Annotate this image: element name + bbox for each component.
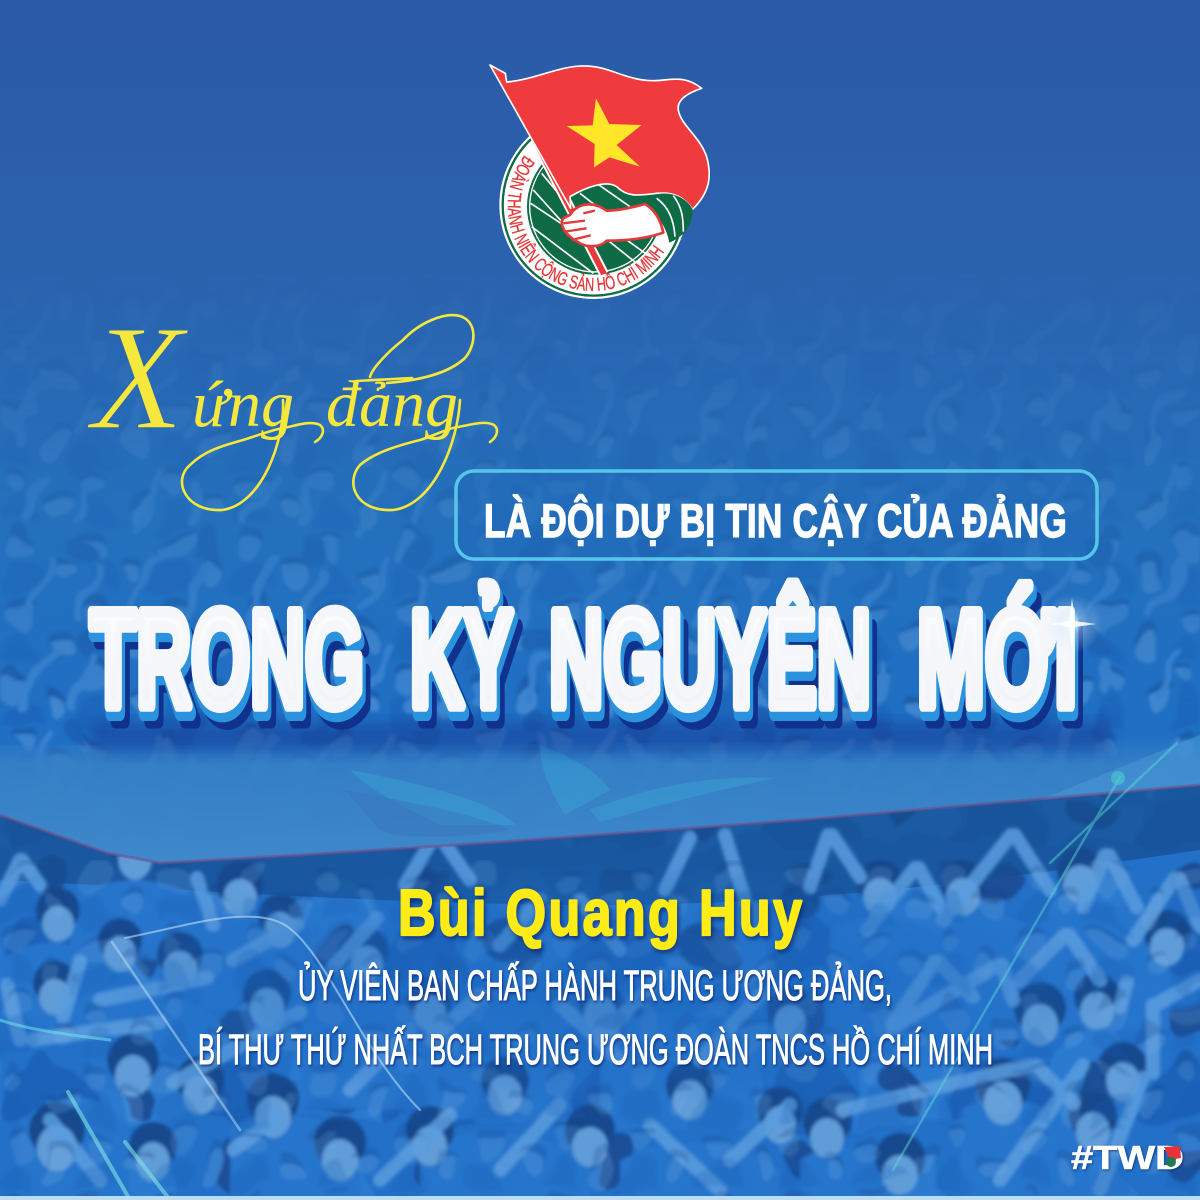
script words: đảng — [326, 368, 458, 441]
mini emblem in letter D — [1164, 1146, 1181, 1167]
title navy extrusion: TRONG — [97, 598, 371, 751]
title navy extrusion: MỚI — [924, 598, 1084, 751]
crowd shadow beneath flag — [0, 785, 1200, 905]
raised arms — [0, 835, 1200, 1190]
flag lower edge tint — [0, 785, 1200, 863]
flag — [490, 65, 709, 209]
emblem green rings — [503, 114, 684, 296]
flag right light fold — [1040, 735, 1200, 800]
decorative light curves — [0, 743, 1177, 1200]
script flourishes — [182, 315, 497, 510]
title white face — [90, 582, 1077, 736]
arm and fist — [562, 204, 663, 246]
emblem outer white disc — [499, 111, 687, 299]
logo: Ho Chi Minh Communist Youth Union emblem — [489, 64, 710, 299]
title navy extrusion: KỶ — [417, 597, 520, 751]
star — [567, 98, 642, 167]
name text: Bùi Quang Huy — [398, 878, 802, 949]
hashtag text: #TWD — [1071, 1139, 1184, 1176]
title light blue extrusion: NGUYÊN — [551, 590, 873, 743]
shirts — [0, 880, 1170, 1200]
hair — [29, 822, 1190, 1183]
title navy extrusion — [97, 597, 1084, 751]
main title — [90, 582, 1084, 751]
crowd fine texture — [0, 860, 1200, 1200]
background: distant crowd — [0, 428, 1200, 756]
flag dark fold — [345, 790, 510, 837]
faces — [37, 840, 1184, 1195]
background: foreground crowd — [0, 785, 1200, 1200]
emblem inner green disc with stripes — [527, 139, 663, 275]
bottom light edge — [0, 1196, 1200, 1200]
script words: ứng — [192, 368, 294, 441]
subtitle box — [456, 471, 1097, 559]
fist finger lines — [563, 211, 595, 240]
title white face: MỚI — [917, 583, 1077, 736]
script heading: Xứng đảng — [87, 295, 497, 510]
sleeve — [643, 193, 693, 243]
subtitle border — [456, 471, 1097, 559]
title light blue extrusion: TRONG — [92, 590, 366, 743]
title white face: TRONG — [90, 583, 364, 736]
title light blue extrusion: MỚI — [919, 590, 1079, 743]
emblem curved name text: ĐOÀN THANH NIÊN CỘNG SẢN HỒ CHÍ MINH — [508, 156, 664, 292]
speaker title — [198, 961, 993, 1074]
title navy extrusion: NGUYÊN — [556, 598, 878, 751]
crowd base texture — [0, 800, 1200, 1200]
flag pole — [535, 140, 604, 274]
subtitle text: LÀ ĐỘI DỰ BỊ TIN CẬY CỦA ĐẢNG — [484, 494, 1067, 547]
title white face: KỶ — [410, 582, 513, 736]
flag surface — [0, 735, 1200, 863]
background: raised flag band — [0, 735, 1200, 863]
hashtag with mini emblem — [1071, 1139, 1184, 1176]
title white face: NGUYÊN — [549, 583, 871, 736]
title drop shadow across band — [90, 722, 1110, 752]
title light blue extrusion: KỶ — [412, 589, 515, 743]
sparkle on title — [1042, 594, 1102, 654]
crowd figures — [0, 822, 1200, 1200]
flag folds — [350, 745, 775, 825]
script words: X — [87, 295, 189, 461]
background: tint behind name block — [80, 865, 1120, 1105]
title light blue extrusion — [92, 589, 1079, 743]
